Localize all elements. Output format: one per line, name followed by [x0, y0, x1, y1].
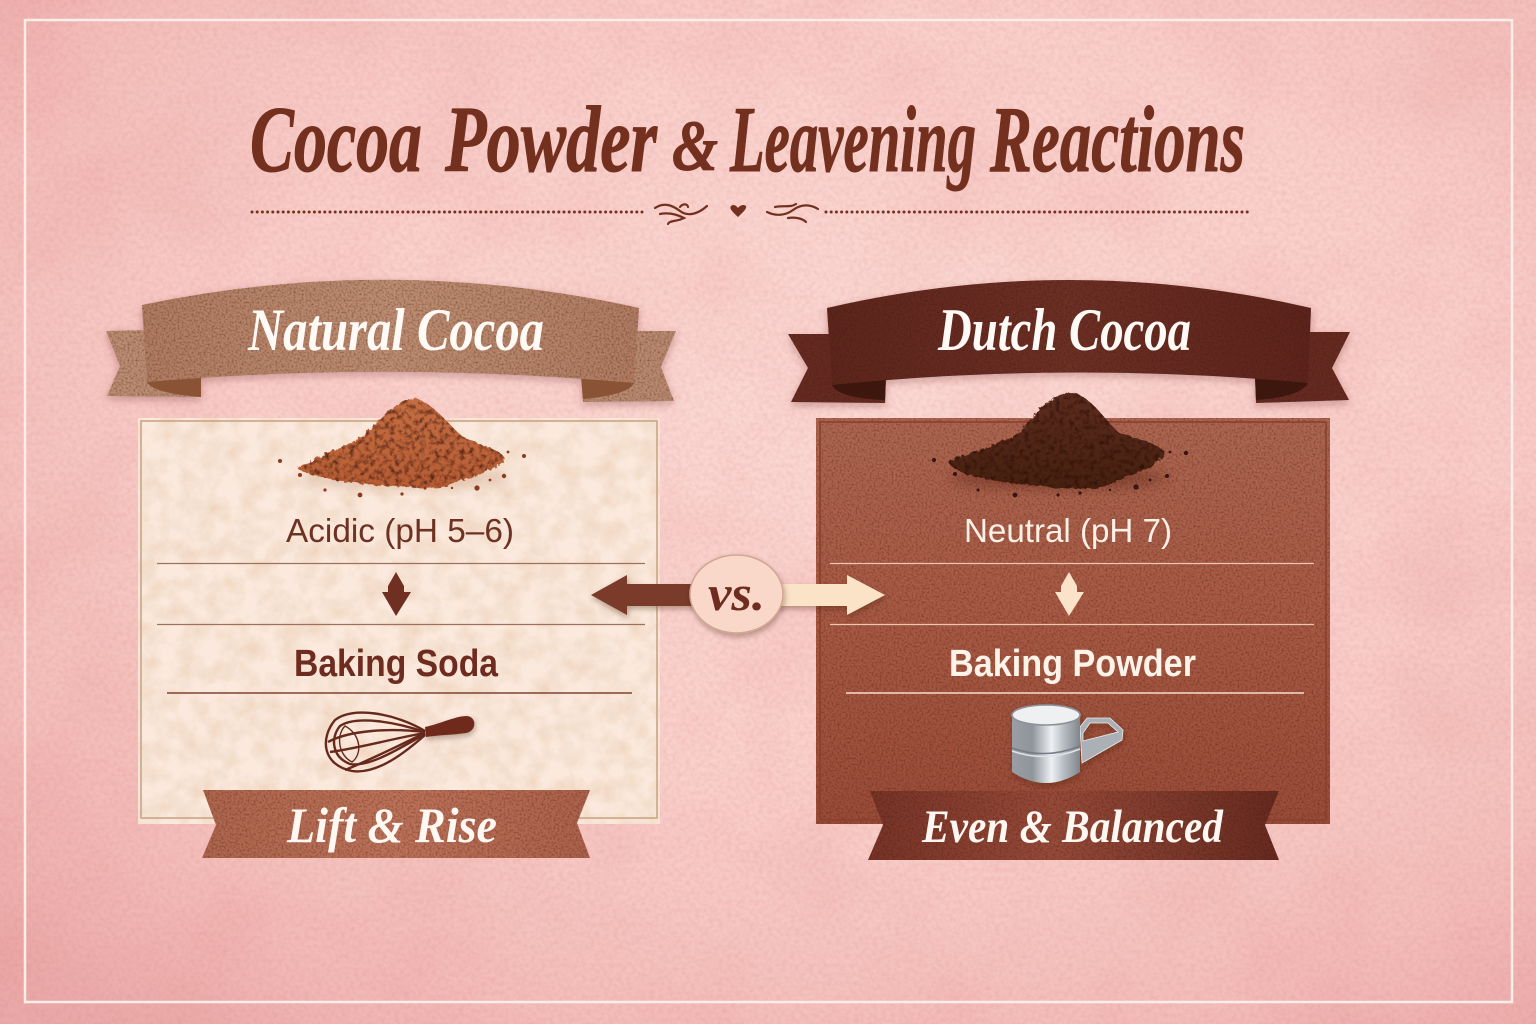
ribbon: even and balanced: [868, 791, 1279, 860]
title: Powder: [444, 88, 658, 192]
text: acidic ph: Acidic (pH 5–6): [286, 512, 514, 549]
icon: right flourish: [767, 204, 818, 222]
ribbon: lift and rise: [202, 790, 590, 858]
text: baking powder: Baking Powder: [949, 643, 1196, 685]
ribbon: dutch cocoa: [788, 280, 1350, 403]
vs badge: vs.: [708, 565, 765, 621]
sifter rim: [1012, 705, 1080, 725]
arrow: right: [775, 575, 885, 615]
title divider with flourishes: [252, 204, 1252, 224]
divider: [157, 564, 645, 624]
whisk handle: [425, 716, 474, 737]
icon: heart: [730, 205, 746, 217]
ribbon: natural cocoa: [106, 280, 676, 402]
icon: natural cocoa pile: [278, 398, 526, 497]
divider: [846, 692, 1304, 694]
ribbon title: Dutch Cocoa: [937, 297, 1191, 363]
icon: sifter: [1012, 705, 1123, 783]
icon: left flourish: [655, 204, 707, 224]
icon: dutch cocoa pile: [932, 392, 1188, 497]
icon: down arrow: [1055, 572, 1084, 616]
title: Reactions: [989, 88, 1245, 192]
icon: whisk: [326, 713, 474, 771]
divider: [167, 692, 632, 694]
vs comparison arrows: [591, 555, 885, 633]
title: [250, 88, 1245, 192]
icon: down arrow: [382, 572, 411, 616]
text: neutral ph: Neutral (pH 7): [964, 512, 1172, 549]
arrow: left: [591, 575, 700, 615]
sifter body: [1012, 716, 1080, 783]
text: baking soda: Baking Soda: [294, 643, 499, 685]
ribbon title: Natural Cocoa: [247, 297, 544, 363]
card background: [816, 418, 1330, 824]
title: Leavening: [729, 88, 976, 192]
divider: [830, 564, 1314, 624]
title: Cocoa: [250, 88, 422, 192]
sifter handle: [1080, 718, 1123, 763]
panel: natural cocoa: [106, 280, 676, 858]
ribbon text: Even & Balanced: [921, 801, 1224, 853]
panel: dutch cocoa: [788, 280, 1350, 860]
ribbon text: Lift & Rise: [286, 797, 497, 853]
title: &: [672, 106, 718, 186]
card background: [138, 418, 660, 824]
vs badge: [690, 555, 783, 633]
